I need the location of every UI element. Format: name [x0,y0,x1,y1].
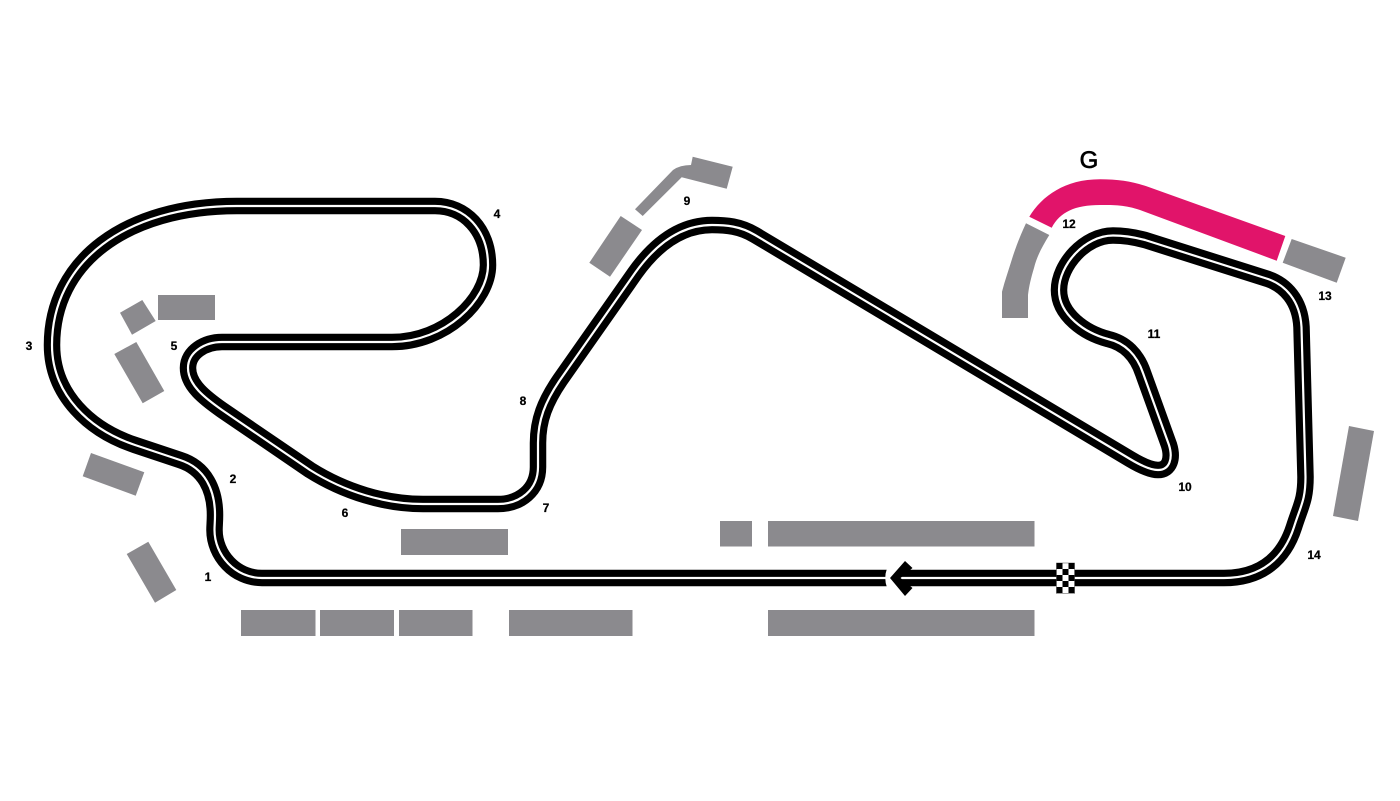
turn numbers: 14 [1307,548,1321,562]
turn numbers: 13 [1318,289,1332,303]
turn numbers: 5 [171,339,178,353]
turn numbers: 11 [1148,327,1161,341]
turn numbers: 9 [684,194,691,208]
turn numbers: 8 [520,394,527,408]
highlighted grandstand G [1029,179,1285,261]
turn numbers: 1 [205,570,212,584]
turn numbers: 10 [1178,480,1192,494]
turn numbers: 3 [26,339,33,353]
turn numbers: 6 [342,506,349,520]
grandstand label G: G [1080,147,1098,174]
start finish chequered flag [1056,563,1074,594]
race track [52,206,1306,578]
turn numbers [26,194,1332,584]
turn numbers: 2 [230,472,237,486]
grey grandstands [83,157,1374,636]
direction arrow [885,561,912,596]
turn numbers: 4 [494,207,501,221]
turn numbers: 12 [1062,217,1076,231]
turn numbers: 7 [543,501,550,515]
